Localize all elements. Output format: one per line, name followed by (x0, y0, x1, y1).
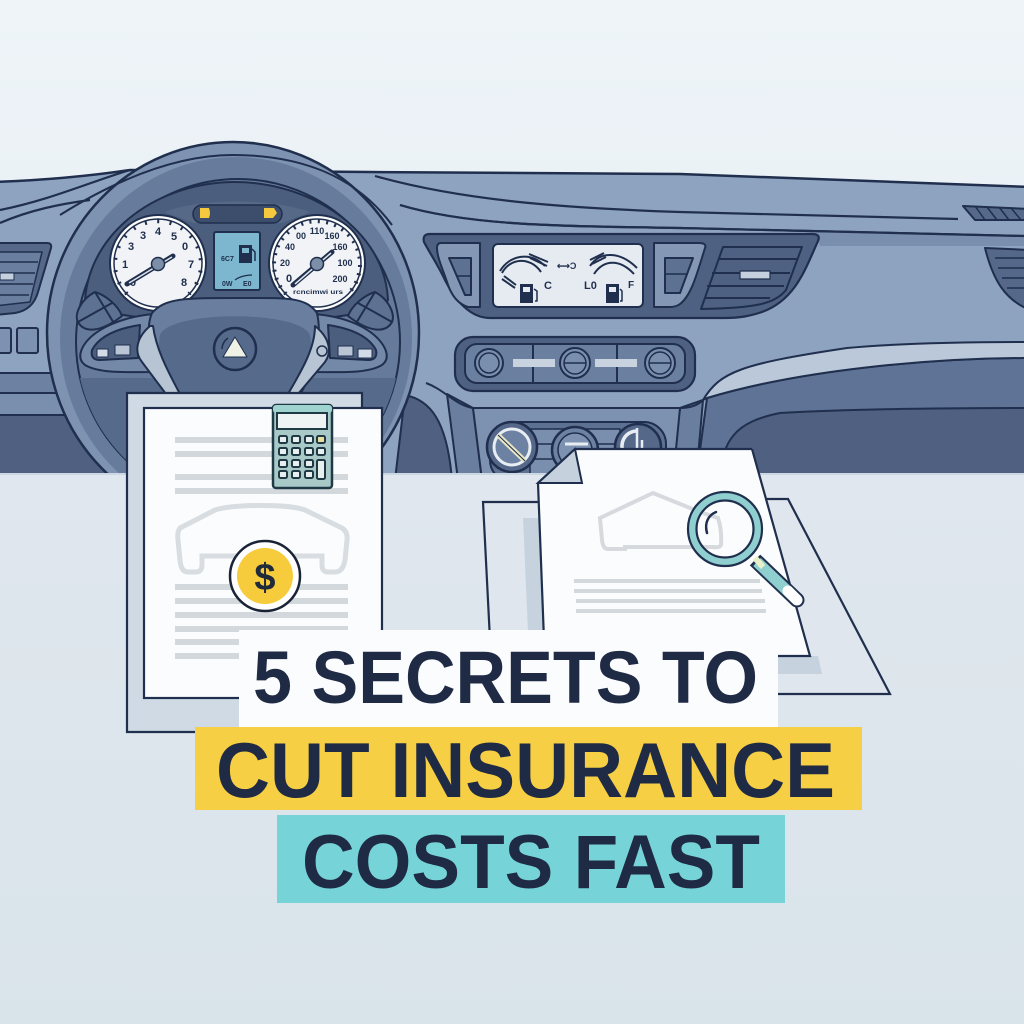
right gauge: 110 (310, 226, 324, 236)
left spoke with buttons (80, 314, 155, 372)
wheel logo (214, 328, 256, 370)
wheel rim (46, 140, 420, 473)
centre console (426, 383, 703, 480)
left button panel (437, 243, 480, 307)
left lower dash bands (0, 373, 110, 474)
right gauge: 160 (332, 242, 348, 252)
magnifying glass (688, 492, 797, 600)
display screen (493, 244, 643, 307)
info screen: E0 (243, 281, 252, 288)
climate knobs (475, 348, 675, 378)
instrument cluster hood (85, 182, 388, 322)
display screen: L0 (584, 280, 597, 292)
airbag hub (148, 297, 320, 392)
needle (127, 256, 173, 284)
display screen: ⟷Ɔ (557, 261, 577, 271)
dollar coin: $ (254, 557, 276, 599)
paddle controls (77, 292, 393, 330)
horn button (317, 346, 327, 356)
left side vent (0, 243, 51, 315)
steering wheel (46, 140, 420, 473)
display screen: C (544, 280, 552, 292)
centre vent (701, 247, 802, 309)
back sheet (483, 499, 890, 694)
title (195, 630, 862, 905)
desk surface (0, 473, 1024, 1024)
right side vent (985, 248, 1024, 310)
info screen: 0W (222, 281, 233, 288)
right gauge: 40 (285, 242, 295, 252)
warning lights pod (165, 202, 310, 223)
display screen: F (628, 280, 634, 291)
right gauge: rcncimwi urs (293, 290, 344, 296)
right gauge: 100 (337, 258, 353, 268)
folded corner (538, 449, 582, 483)
left gauge: 3 (128, 241, 134, 253)
white sheet (144, 408, 382, 698)
left gauge: 7 (188, 259, 194, 271)
info screen (214, 232, 260, 290)
info screen: 6C7 (221, 256, 234, 263)
left gauge: 0 (130, 277, 136, 289)
right gauge: 160 (324, 231, 340, 241)
dashboard trim lines (0, 170, 1024, 236)
text lines (574, 579, 766, 613)
rim upper arcs (60, 155, 392, 225)
right spoke with buttons (313, 314, 387, 372)
document right (483, 449, 890, 694)
left lower centre dark panel (395, 395, 452, 480)
dollar coin (230, 541, 300, 611)
left gauge: 4 (155, 226, 162, 238)
text lines (175, 437, 348, 659)
left switches (0, 328, 38, 353)
backing sheet (127, 393, 362, 732)
left gauge: 3 (140, 230, 146, 242)
left gauge: 8 (181, 277, 187, 289)
left gauge: 5 (171, 231, 177, 243)
front sheet (538, 449, 810, 656)
upper centre bezel (424, 234, 819, 318)
car outline (600, 493, 721, 549)
right button panel (654, 243, 705, 307)
inner wheel opening (75, 178, 401, 461)
left gauge: 0 (182, 241, 188, 253)
left gauge (110, 215, 206, 311)
right gauge: 20 (280, 258, 290, 268)
left gauge: 1 (122, 259, 128, 271)
shaded band under dash top (815, 232, 1024, 246)
fuel pump icons (520, 284, 622, 303)
right lower dash dark panel (696, 342, 1024, 480)
right gauge: 200 (332, 274, 348, 284)
right gauge: 00 (296, 231, 306, 241)
defrost grille (963, 206, 1024, 220)
calculator (273, 405, 332, 488)
lower knob panel (486, 420, 667, 473)
right gauge: 0 (286, 273, 292, 285)
dashboard illustration (0, 140, 1024, 473)
climate control panel (455, 337, 695, 391)
lower opening shade (80, 378, 396, 460)
document left (127, 393, 382, 732)
title line 3 band: COSTS FAST (302, 820, 760, 905)
needle (293, 252, 332, 285)
car outline (178, 506, 347, 572)
title line 2 band: CUT INSURANCE (216, 726, 835, 814)
right gauge (269, 215, 365, 311)
background (0, 0, 1024, 474)
dashboard body (0, 170, 1024, 480)
silver spoke trims (137, 326, 329, 394)
title line 1 band: 5 SECRETS TO (253, 636, 758, 719)
